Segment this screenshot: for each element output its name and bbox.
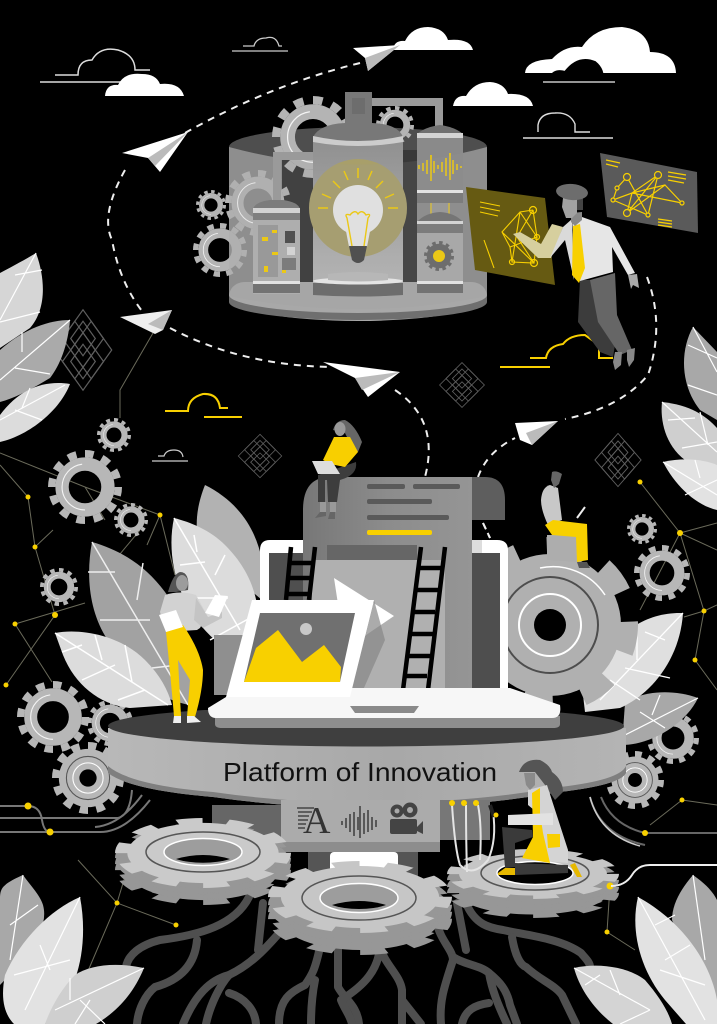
shoes (498, 863, 582, 877)
circuit dots left (24, 802, 54, 836)
hair (168, 572, 188, 592)
trousers front leg (590, 273, 632, 355)
platform (108, 706, 626, 808)
cylinder body (229, 147, 487, 309)
holographic panel right (600, 153, 698, 233)
ladder left (285, 547, 315, 600)
dashed trail in front of roll (483, 523, 490, 538)
paper plane 1 (353, 45, 400, 71)
white cloud left (105, 74, 184, 96)
shoes (315, 512, 335, 519)
tube connector (430, 203, 450, 214)
hair (575, 198, 583, 210)
big gear right (469, 535, 631, 706)
outlined dark cloud (548, 60, 603, 82)
paper plane 3 (120, 310, 172, 334)
hair (333, 420, 362, 452)
head (334, 422, 346, 436)
knot pattern lower left (238, 434, 282, 478)
shirt left side (550, 219, 574, 280)
white cable right (611, 865, 717, 886)
knot pattern centre (440, 363, 484, 407)
paper plane 5 (515, 421, 558, 445)
gears right group (609, 516, 696, 806)
hand right (628, 274, 639, 289)
holographic panel left (466, 187, 555, 285)
dress (522, 788, 550, 863)
gears lower left group (21, 685, 131, 810)
image card shadow (350, 600, 385, 697)
gear base right (454, 851, 612, 916)
trousers back leg (578, 280, 615, 357)
cap top square (352, 98, 365, 114)
gear base centre (275, 864, 445, 952)
shoe (577, 562, 590, 568)
paper right (205, 595, 228, 617)
top (323, 437, 358, 467)
text lines icon (297, 808, 314, 828)
network dots (4, 480, 706, 934)
trousers lower (515, 863, 568, 875)
coat (528, 785, 568, 863)
pipes (277, 102, 439, 204)
video camera icon (390, 802, 423, 834)
head (551, 471, 562, 488)
laptop (312, 461, 340, 474)
circuit dot right (642, 830, 648, 836)
gray box behind woman (214, 635, 260, 695)
laptop (577, 507, 585, 518)
circuit lines right (590, 797, 717, 845)
gears behind machine (196, 100, 412, 274)
trousers (166, 625, 203, 717)
leaves upper left (0, 253, 70, 442)
machine floor (229, 282, 487, 321)
head (176, 575, 188, 591)
small outlined cloud (152, 450, 188, 461)
dashed flight paths (108, 63, 656, 538)
centre tube (313, 137, 403, 283)
translucent arm (513, 224, 563, 258)
neck (571, 212, 582, 226)
leaf behind big gear (583, 613, 683, 712)
trousers upper (502, 827, 533, 868)
arm (508, 813, 553, 825)
shoes (173, 716, 201, 723)
face (524, 773, 535, 790)
dark interior left (282, 160, 313, 282)
yellow cloud left (165, 394, 242, 417)
left tube (253, 200, 300, 294)
dark cloud base line (543, 81, 615, 83)
beret (555, 183, 589, 201)
knot pattern right (595, 433, 641, 487)
paper left (159, 610, 183, 632)
network lines (0, 333, 717, 978)
media icons panel (281, 800, 440, 852)
platform title: Platform of Innovation (223, 757, 497, 787)
seated man on gear (541, 471, 590, 568)
bulb halo (309, 159, 407, 257)
outlined cloud top left (40, 49, 150, 82)
right upper tube (417, 125, 463, 203)
shoes (613, 348, 635, 370)
circuit lines left (0, 790, 150, 832)
ladder right (403, 547, 445, 690)
bulb pedestal (313, 272, 403, 296)
shirt (572, 217, 635, 281)
white cloud middle right (453, 82, 533, 106)
cap ring (313, 136, 403, 146)
leaves bottom right (574, 875, 717, 1024)
woman with tablet on laptop (159, 572, 228, 723)
laptop base (208, 688, 560, 728)
outlined cloud centre (232, 37, 288, 51)
centre tube cap (313, 92, 403, 142)
tool tip (494, 812, 498, 818)
roots (126, 897, 590, 1024)
leaf over gear right (622, 692, 698, 745)
laptop screen (260, 540, 508, 690)
play arrow (334, 578, 394, 650)
pocket (547, 834, 560, 848)
trousers (545, 520, 588, 562)
leaves bottom left (0, 875, 144, 1024)
yellow cloud right (500, 335, 613, 367)
cylinder back (229, 127, 487, 167)
outlined cloud right (523, 113, 613, 138)
flying man (513, 183, 639, 370)
tie (572, 224, 585, 283)
lab coat woman (490, 760, 582, 877)
right lower tube (417, 212, 463, 293)
white cloud top right (525, 27, 676, 73)
paper plane 4 (323, 362, 400, 397)
connector dots (449, 800, 614, 890)
white cloud top (393, 27, 473, 50)
tool (490, 805, 494, 817)
bulb (318, 168, 398, 263)
audio wave icon (342, 806, 376, 838)
gear base left (122, 821, 284, 902)
image card (226, 600, 374, 697)
paper plane 2 (122, 132, 188, 172)
shirt (541, 485, 562, 525)
arm right (194, 598, 222, 628)
top machine (196, 92, 487, 321)
letter icon: A (303, 800, 331, 842)
support block back (212, 800, 490, 880)
knot pattern left (54, 310, 112, 390)
legs (318, 462, 356, 502)
glass sheen (229, 147, 487, 309)
scroll document (303, 477, 505, 700)
circuit line white (590, 797, 640, 846)
leaves behind platform left (55, 485, 262, 708)
dark interior right (403, 150, 417, 282)
hair (519, 760, 563, 800)
head (562, 198, 577, 218)
floor lip (229, 295, 487, 320)
lower legs (320, 502, 336, 512)
leaves middle right (662, 327, 717, 510)
seated woman with laptop (312, 420, 362, 519)
cables (452, 805, 494, 872)
gears upper left group (42, 420, 146, 604)
sweater (160, 592, 207, 632)
